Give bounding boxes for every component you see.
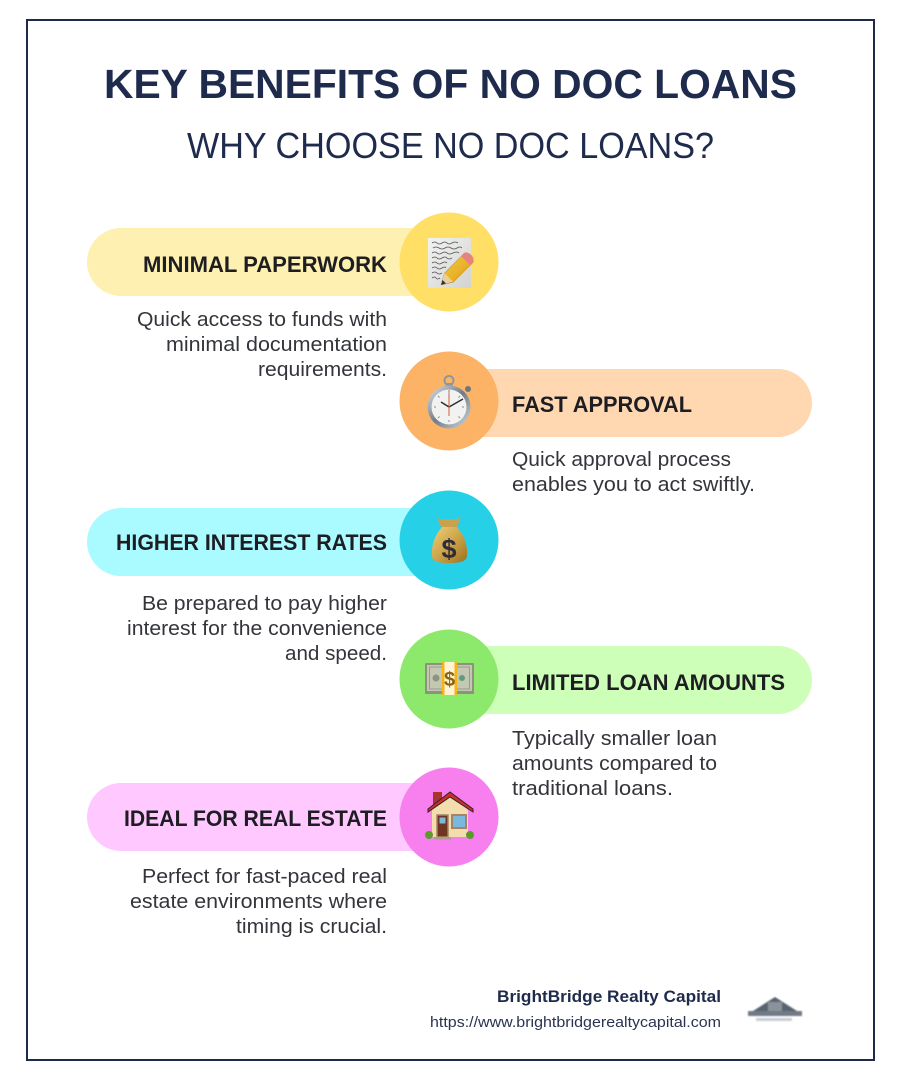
description: fast approval: [512, 449, 755, 496]
description: ideal for real estate: Perfect for fast-paced real: [142, 866, 387, 888]
description: minimal paperwork: minimal documentation: [166, 334, 387, 356]
footer: website url: https://www.brightbridgerealtycapital.com: [430, 1014, 721, 1031]
icon: banknotes: [425, 662, 474, 695]
description: fast approval: Quick approval process: [512, 449, 731, 471]
description: fast approval: enables you to act swiftly.: [512, 474, 755, 496]
heading pill: higher interest rates: [87, 508, 449, 576]
icon circle: pink: [400, 768, 498, 866]
icon: stopwatch: [428, 376, 471, 428]
description: higher interest rates: [127, 593, 387, 665]
heading: ideal for real estate: IDEAL FOR REAL ESTATE: [124, 806, 387, 831]
panel: ideal for real estate: [87, 768, 498, 938]
icon circle: orange: [400, 352, 498, 450]
panel: fast approval: [400, 352, 812, 496]
subtitle: WHY CHOOSE NO DOC LOANS?: [187, 125, 714, 166]
heading pill: fast approval: [449, 369, 812, 437]
icon: money bag: $: [441, 534, 457, 564]
description: minimal paperwork: [137, 309, 387, 381]
description: limited loan amounts: [512, 728, 717, 800]
icon: money bag: [432, 517, 467, 564]
heading pill: ideal for real estate: [87, 783, 449, 851]
description: minimal paperwork: requirements.: [258, 359, 387, 381]
description: higher interest rates: interest for the convenience: [127, 618, 387, 640]
description: higher interest rates: and speed.: [285, 643, 387, 665]
icon: house: [425, 792, 474, 840]
icon: memo and pencil: [428, 238, 474, 288]
description: limited loan amounts: Typically smaller loan: [512, 728, 717, 750]
panel: minimal paperwork: [87, 212, 498, 381]
heading: minimal paperwork: MINIMAL PAPERWORK: [143, 252, 387, 277]
heading: fast approval: FAST APPROVAL: [512, 392, 692, 417]
description: ideal for real estate: [130, 866, 387, 938]
heading: higher interest rates: HIGHER INTEREST RATES: [116, 530, 387, 555]
icon circle: yellow: [400, 212, 498, 312]
heading pill: minimal paperwork: [87, 228, 449, 296]
icon circle: cyan: [400, 490, 498, 590]
panel: limited loan amounts: [400, 630, 812, 800]
footer: company name: BrightBridge Realty Capital: [497, 987, 721, 1006]
icon circle: green: [400, 630, 498, 728]
description: minimal paperwork: Quick access to funds with: [137, 309, 387, 331]
description: limited loan amounts: amounts compared to: [512, 753, 717, 775]
heading: limited loan amounts: LIMITED LOAN AMOUNTS: [512, 670, 785, 695]
description: higher interest rates: Be prepared to pay higher: [142, 593, 387, 615]
description: ideal for real estate: estate environments where: [130, 891, 387, 913]
logo: [748, 997, 802, 1021]
description: limited loan amounts: traditional loans.: [512, 778, 673, 800]
panel: higher interest rates: [87, 490, 498, 665]
heading pill: limited loan amounts: [449, 646, 812, 714]
title: KEY BENEFITS OF NO DOC LOANS: [104, 61, 797, 107]
icon: banknotes: $: [444, 669, 455, 691]
description: ideal for real estate: timing is crucial.: [236, 916, 387, 938]
